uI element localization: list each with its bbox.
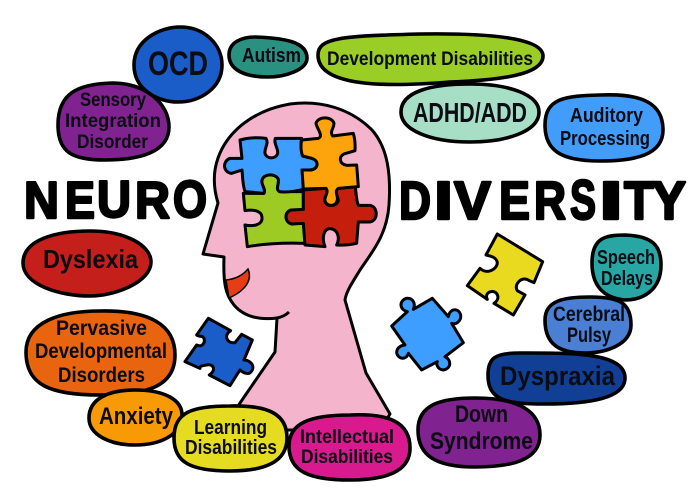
bubble: Learning Disabilities: Learning	[194, 417, 267, 439]
bubble: Down Syndrome: Syndrome	[430, 428, 533, 455]
bubble: Auditory Processing: Processing	[560, 128, 650, 150]
bubble: Intellectual Disabilities: Intellectual	[300, 427, 394, 448]
puzzle piece: green	[243, 175, 305, 247]
bubble: Cerebral Pulsy	[545, 297, 631, 353]
bubble: Anxiety: Anxiety	[99, 403, 174, 430]
title: DIVERSITY: E	[499, 171, 530, 231]
bubble: Auditory Processing	[545, 95, 663, 161]
bubble: Down Syndrome: Down	[455, 401, 508, 428]
title: NEURO: R	[135, 172, 170, 230]
puzzle piece: red	[286, 187, 376, 247]
title: DIVERSITY: Y	[652, 171, 686, 231]
bubble: Intellectual Disabilities	[289, 415, 410, 480]
bubble: Pervasive Developmental Disorders	[26, 311, 175, 395]
bubble: Dyspraxia	[488, 353, 625, 404]
bubble: Pervasive Developmental Disorders: Pervasive	[56, 317, 147, 340]
bubble: Speech Delays	[592, 235, 661, 300]
bubble: ADHD/ADD	[401, 84, 539, 142]
bubble: Speech Delays: Delays	[601, 268, 653, 290]
bubble: Pervasive Developmental Disorders: Disorders	[58, 364, 145, 387]
title: DIVERSITY: D	[399, 171, 431, 231]
puzzle piece: blue	[225, 138, 317, 193]
bubble: Sensory Integration Disorder: Disorder	[77, 132, 149, 153]
bubble: Autism	[229, 37, 307, 77]
bubble: Dyslexia	[23, 231, 151, 296]
bubble: Sensory Integration Disorder: Integration	[65, 111, 161, 132]
bubble: Sensory Integration Disorder: Sensory	[80, 90, 146, 111]
title: NEURO: U	[97, 171, 131, 229]
bubble: Dyspraxia: Dyspraxia	[500, 361, 616, 391]
brain puzzle	[225, 118, 376, 247]
title: DIVERSITY: I	[434, 171, 453, 231]
puzzle piece: yellow	[467, 234, 543, 315]
bubble: Cerebral Pulsy: Cerebral	[553, 303, 625, 326]
bubble: Pervasive Developmental Disorders: Developmental	[35, 340, 167, 363]
title: NEURO: O	[173, 171, 207, 229]
bubble: Anxiety	[89, 390, 182, 445]
title: DIVERSITY: I	[599, 171, 623, 231]
title: DIVERSITY	[399, 168, 686, 231]
head profile	[203, 103, 390, 430]
bubble: OCD	[134, 27, 222, 102]
title: DIVERSITY: S	[570, 168, 596, 231]
bubble: Learning Disabilities	[174, 406, 287, 471]
puzzle piece: dark blue	[185, 318, 253, 386]
puzzle piece: light blue	[392, 298, 463, 370]
bubble: Auditory Processing: Auditory	[570, 105, 644, 127]
bubble: OCD: OCD	[148, 45, 208, 83]
bubble: ADHD/ADD: ADHD/ADD	[413, 97, 527, 128]
loose puzzle pieces	[185, 234, 543, 386]
mouth	[226, 269, 249, 298]
bubble: Learning Disabilities: Disabilities	[185, 437, 277, 459]
bubble: Speech Delays: Speech	[597, 247, 655, 269]
bubble: Cerebral Pulsy: Pulsy	[567, 324, 611, 347]
bubble: Intellectual Disabilities: Disabilities	[301, 447, 393, 468]
puzzle piece: orange	[301, 118, 358, 205]
bubble: Down Syndrome	[418, 398, 540, 467]
title: DIVERSITY: V	[454, 171, 491, 231]
title: DIVERSITY: R	[534, 171, 566, 231]
title: NEURO: N	[24, 172, 59, 230]
title: DIVERSITY: T	[624, 171, 654, 231]
bubble: Development Disabilities: Development Disabilities	[327, 49, 533, 70]
title: NEURO	[24, 171, 207, 230]
bubble: Development Disabilities	[318, 34, 543, 85]
bubble: Autism: Autism	[242, 45, 301, 67]
title: NEURO: E	[65, 172, 95, 230]
bubble: Sensory Integration Disorder	[58, 83, 169, 160]
bubble: Dyslexia: Dyslexia	[43, 244, 138, 274]
